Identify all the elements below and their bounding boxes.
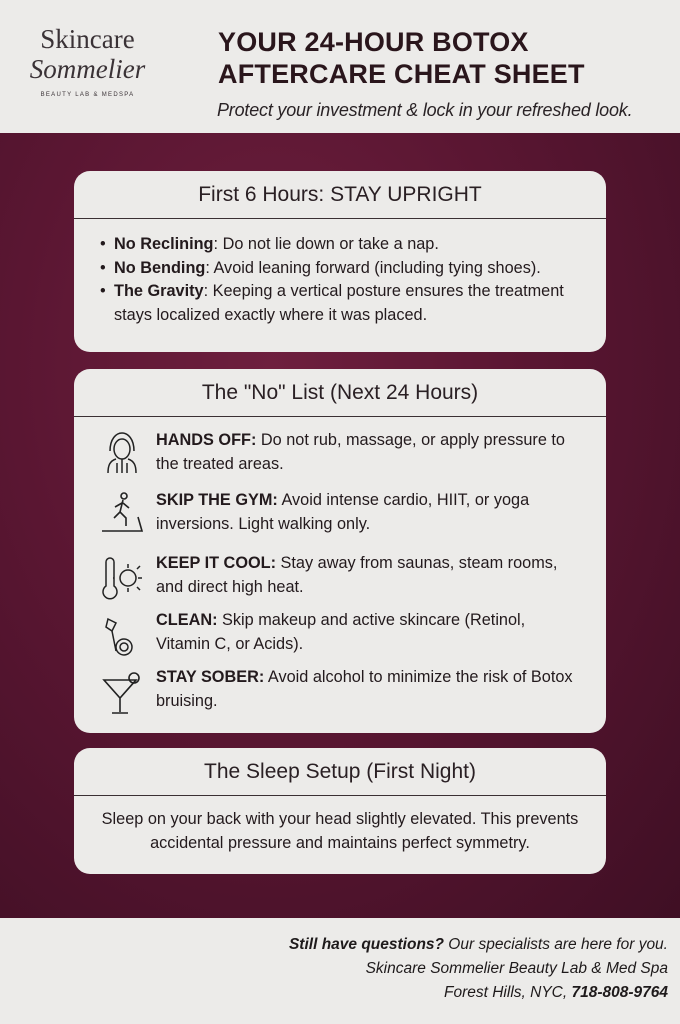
- maroon background: [0, 133, 680, 918]
- title: YOUR 24-HOUR BOTOX: [218, 27, 529, 57]
- logo: Skincare: [40, 24, 135, 54]
- item: hands off: HANDS OFF: Do not rub, massage, or apply pressure to the treated areas.: [156, 431, 565, 472]
- footer contact: Forest Hills, NYC, 718-808-9764: [444, 984, 668, 1001]
- panel: first 6 hours: [74, 171, 606, 352]
- footer contact: Still have questions? Our specialists are here for you.: [289, 936, 668, 953]
- header band: [0, 0, 680, 133]
- title: [218, 27, 585, 89]
- logo: [30, 24, 146, 98]
- icon: thermometer sun: [102, 557, 142, 600]
- heading: The Sleep Setup (First Night): [204, 760, 476, 783]
- footer contact: Skincare Sommelier Beauty Lab & Med Spa: [366, 960, 668, 977]
- footer contact: [289, 936, 668, 1001]
- heading: The "No" List (Next 24 Hours): [202, 381, 478, 404]
- bullet list: No Reclining: Do not lie down or take a nap.: [114, 235, 439, 253]
- item: clean: CLEAN: Skip makeup and active skincare (Retinol, Vitamin C, or Acids).: [156, 611, 525, 652]
- item: sober: STAY SOBER: Avoid alcohol to minimize the risk of Botox bruising.: [156, 668, 573, 710]
- logo: Sommelier: [30, 54, 145, 84]
- subtitle: Protect your investment & lock in your refreshed look.: [217, 100, 632, 120]
- text: Sleep on your back with your head slightly elevated. This prevents accidental pressure and maintains perfect symmetry.: [102, 810, 578, 852]
- icon: cocktail: [102, 672, 140, 714]
- icon: treadmill: [102, 492, 143, 532]
- panel: no list: [74, 369, 606, 733]
- heading: [74, 171, 606, 219]
- bullet list: The Gravity: Keeping a vertical posture ensures the treatment stays localized exactly where it was placed.: [114, 282, 564, 324]
- icon: makeup brush: [105, 618, 133, 656]
- bullet list: No Bending: Avoid leaning forward (including tying shoes).: [114, 258, 541, 276]
- logo: BEAUTY LAB & MEDSPA: [41, 92, 134, 98]
- heading: [74, 369, 606, 417]
- icon: face: [107, 432, 137, 473]
- item: gym: SKIP THE GYM: Avoid intense cardio, HIIT, or yoga inversions. Light walking only.: [156, 491, 529, 532]
- bullet list: [100, 235, 564, 324]
- heading: First 6 Hours: STAY UPRIGHT: [198, 183, 482, 206]
- heading: [74, 748, 606, 796]
- title: AFTERCARE CHEAT SHEET: [218, 59, 585, 89]
- panel: sleep setup: [74, 748, 606, 874]
- item: keep cool: KEEP IT COOL: Stay away from saunas, steam rooms, and direct high heat.: [156, 554, 557, 596]
